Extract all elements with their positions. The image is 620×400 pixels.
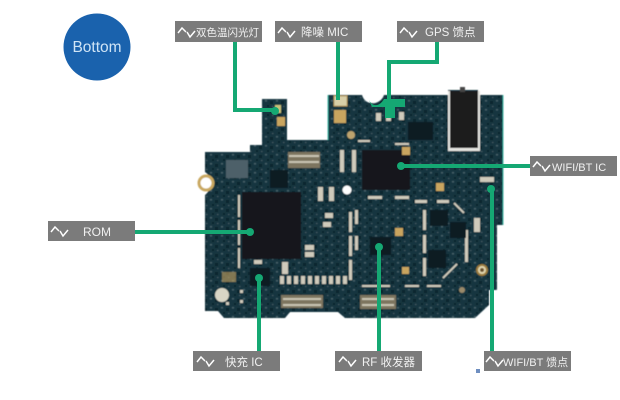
- label: WIFI/BT IC: WIFI/BT IC: [552, 162, 606, 174]
- callout line: ROM: [135, 228, 254, 236]
- gold pads: [222, 110, 444, 282]
- label: 双色温闪光灯: 双色温闪光灯: [196, 26, 259, 39]
- label: 双色温闪光灯: [175, 21, 262, 42]
- label: WIFI/BT IC: [530, 156, 617, 176]
- label: ROM: [48, 221, 135, 241]
- circuit board: [199, 87, 503, 318]
- label: 快充 IC: 快充 IC: [225, 355, 263, 369]
- callout line: noise cancel MIC: [336, 42, 340, 100]
- connectors: [281, 152, 396, 309]
- label: GPS 馈点: GPS 馈点: [425, 26, 475, 39]
- label: 降噪 MIC: [275, 21, 362, 42]
- lighter board edge: [328, 95, 503, 225]
- label: WIFI/BT 馈点: [484, 351, 571, 371]
- RF chip: [370, 237, 391, 255]
- callout line: GPS feed: [369, 42, 437, 118]
- watermark mark: [476, 369, 480, 373]
- callout line: WIFI/BT IC: [397, 162, 530, 170]
- label: RF 收发器: RF 收发器: [362, 355, 416, 369]
- charge chip: [250, 268, 270, 286]
- board outline: [205, 90, 503, 318]
- QR block: [226, 160, 248, 178]
- label: ROM: ROM: [83, 225, 111, 239]
- callout line: RF transceiver: [375, 243, 383, 351]
- callout line: WIFI/BT feed: [487, 185, 495, 351]
- label: RF 收发器: [335, 351, 422, 371]
- label: 快充 IC: [193, 351, 280, 371]
- ROM chip: [242, 192, 301, 259]
- audio jack: [448, 87, 480, 151]
- WIFI/BT chip: [362, 150, 410, 190]
- small components: [226, 112, 494, 305]
- mounting pad and holes: [199, 131, 487, 302]
- small dark chips: [270, 122, 466, 268]
- badge: Bottom: [64, 14, 130, 80]
- callout line: fast charge IC: [255, 274, 263, 351]
- label: GPS 馈点: [397, 21, 484, 42]
- badge: Bottom: Bottom: [72, 39, 122, 56]
- label: WIFI/BT 馈点: WIFI/BT 馈点: [503, 356, 568, 369]
- label: 降噪 MIC: 降噪 MIC: [301, 25, 348, 39]
- callout line: dual colour flash: [235, 42, 279, 115]
